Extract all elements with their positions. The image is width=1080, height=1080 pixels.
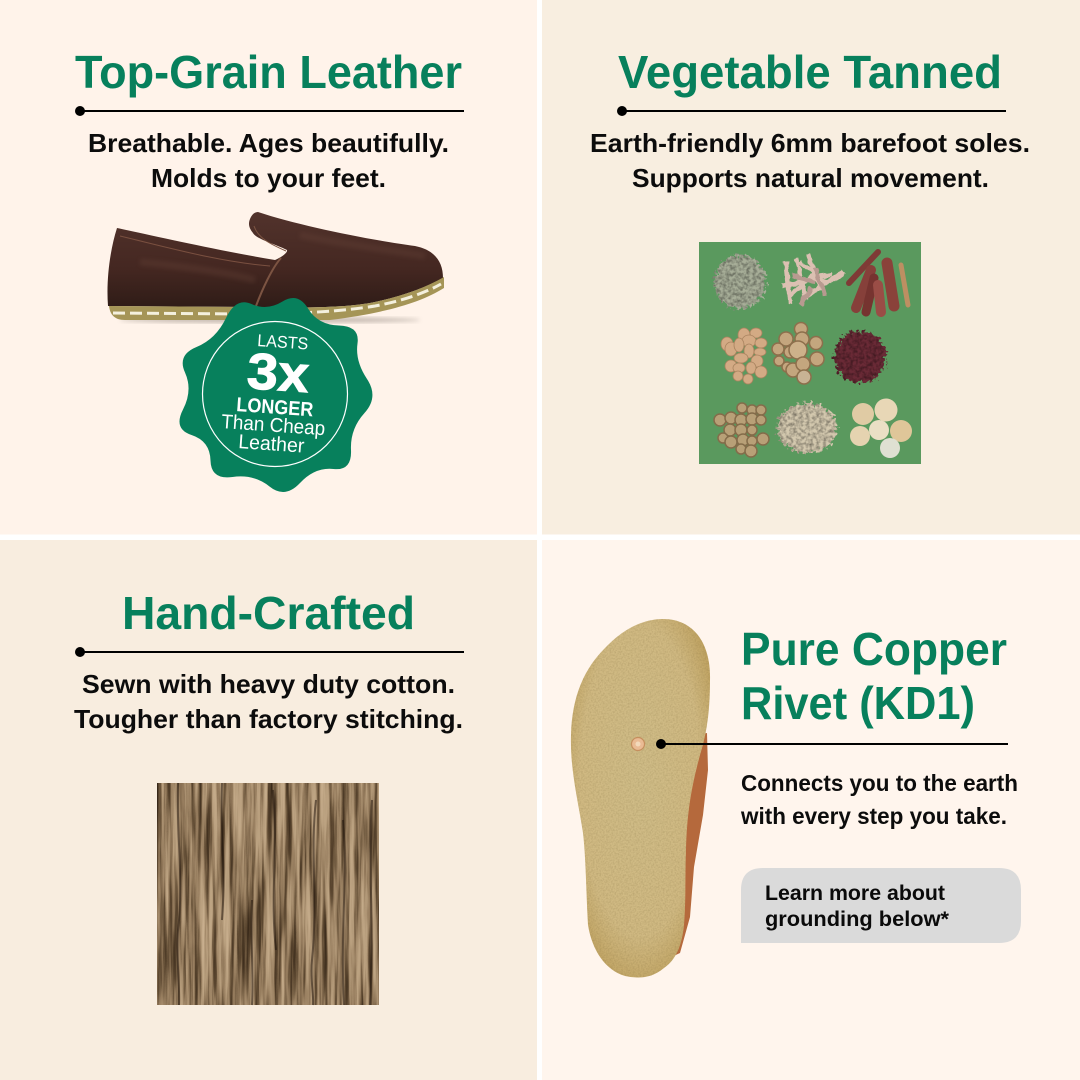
ingredient: grey-green leaves [714,255,766,309]
heading: Top-Grain Leather: Top-Grain Leather [75,46,462,98]
description text: Supports natural movement. [632,163,989,193]
heading: Pure Copper Rivet (KD1): Pure Copper [741,623,1007,675]
image: brown leather shoe [107,212,444,323]
description text [590,128,1030,193]
callout button: learn more [741,868,1021,943]
badge: lasts 3x longer [179,298,372,492]
description text [88,128,449,193]
description text: Breathable. Ages beautifully. [88,128,449,158]
ingredient: dark red petals [834,331,886,383]
copper rivet [632,738,644,750]
panel: hand-crafted [0,540,537,1080]
ingredient: white gall nuts [850,398,912,458]
ingredient: red bark [849,252,908,312]
heading: Vegetable Tanned: Vegetable Tanned [618,46,1002,98]
heading rule with dot [75,647,464,657]
heading: Pure Copper Rivet (KD1): Rivet (KD1) [741,677,975,729]
callout button: learn more: grounding below* [765,908,950,931]
image: nine tanning ingredients on green [699,242,921,464]
badge: lasts 3x longer: LASTS [257,331,309,354]
description text: Sewn with heavy duty cotton. [82,669,455,699]
panel: pure copper rivet [542,540,1080,1080]
badge: lasts 3x longer: Leather [238,431,305,458]
callout button: learn more: Learn more about [765,882,945,905]
badge: lasts 3x longer: 3x [245,342,311,403]
ingredient: dried cups pile [714,403,769,457]
heading: Hand-Crafted: Hand-Crafted [122,587,415,639]
description text: with every step you take. [740,803,1007,829]
ingredient: hazel nuts [721,328,767,384]
description text: Tougher than factory stitching. [74,704,463,734]
panel: top-grain leather [0,0,537,534]
image: shoe sole with copper rivet [571,619,710,977]
image: brown cotton thread [157,783,379,1005]
ingredient: pale root pile [777,403,837,453]
ingredient: pale wood chips [782,254,844,305]
panel: vegetable tanned [542,0,1080,534]
heading rule with dot [617,106,1006,116]
heading: Pure Copper Rivet (KD1) [741,623,1007,729]
description text: Connects you to the earth [741,770,1018,796]
badge: lasts 3x longer: LONGER [236,394,314,421]
heading rule with dot [75,106,464,116]
callout line with dot [656,739,1008,749]
badge: lasts 3x longer: Than Cheap [221,411,326,440]
ingredient: dried cups [772,322,824,384]
description text [740,770,1018,829]
description text: Molds to your feet. [151,163,386,193]
description text [74,669,463,734]
description text: Earth-friendly 6mm barefoot soles. [590,128,1030,158]
